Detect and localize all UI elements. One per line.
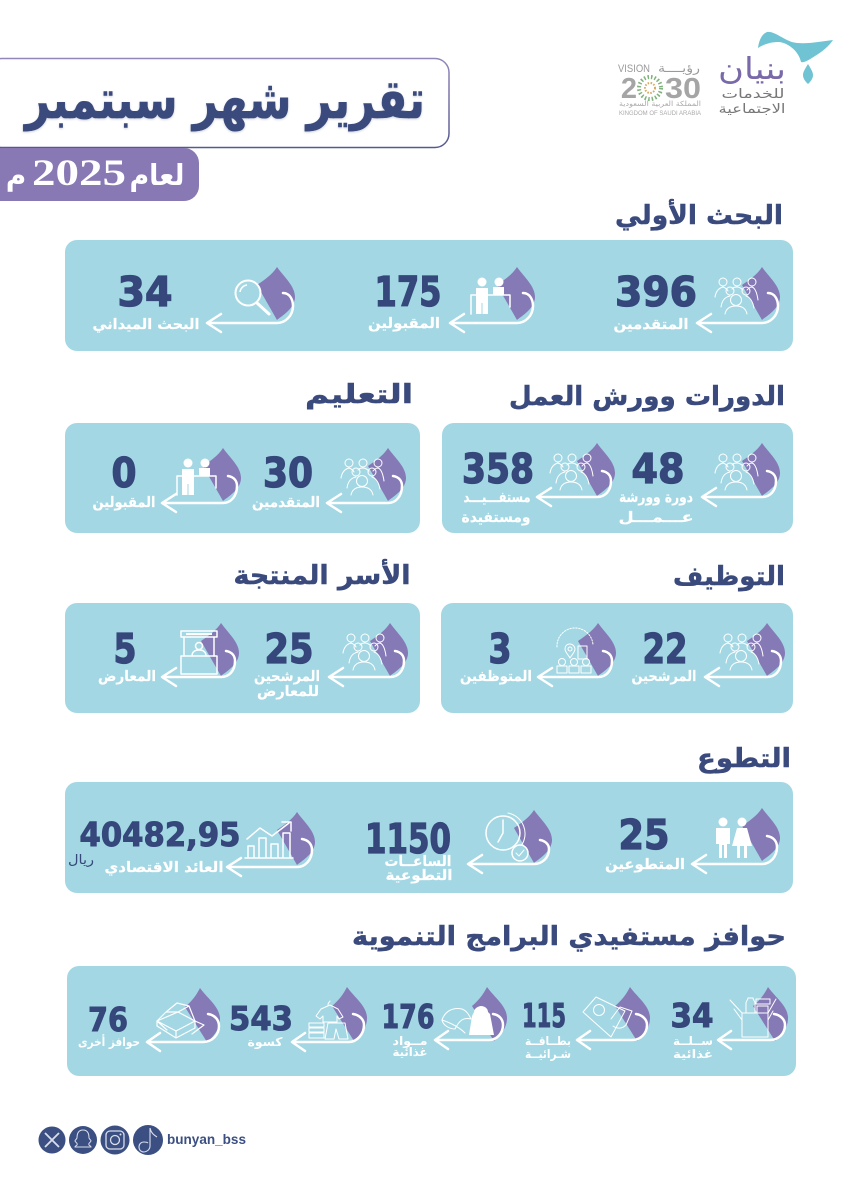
stat: beneficiaries 358: 358 — [462, 445, 534, 493]
logo: Vision 2030: 30 — [665, 73, 701, 105]
stat: clothing 543: كسوة — [248, 1035, 283, 1050]
heading: primary research: البحث الأولي — [615, 199, 783, 231]
stat: nominated for exhibitions 25 — [254, 623, 408, 700]
stat: nominated 22: 22 — [642, 625, 688, 673]
stat: volunteer hours 1150: التطوعية — [386, 868, 452, 884]
stat: economic return 40482,95 — [68, 812, 315, 877]
heading: education: التعليم — [305, 380, 413, 410]
stat: other incentives 76: حوافز أخرى — [78, 1034, 140, 1050]
stat: exhibitions 5 — [98, 623, 239, 686]
stat: purchase card 115: 115 — [522, 996, 566, 1035]
heading: productive families: الأسر المنتجة — [234, 559, 410, 591]
stat: nominated for exhibitions 25: للمعارض — [257, 684, 319, 700]
logo: Bunyan — [718, 32, 833, 117]
stat: clothing 543 — [229, 987, 367, 1051]
stat: food basket 34: 34 — [670, 996, 714, 1035]
stat: clothing 543: 543 — [229, 999, 293, 1038]
stat: applicants 30: 30 — [263, 449, 313, 497]
stat: field research 34: 34 — [118, 268, 172, 316]
stat: employed 3: 3 — [488, 625, 512, 673]
stat: food items 176 — [382, 987, 507, 1059]
stat: exhibitions 5: المعارض — [98, 669, 156, 685]
stat: courses 48: عـــمـــل — [618, 510, 694, 526]
stat: employed 3 — [460, 623, 616, 686]
stat: exhibitions 5: 5 — [114, 625, 136, 673]
logo: Vision 2030: 2 — [621, 73, 637, 105]
stat: volunteers 25 — [605, 808, 780, 873]
logo: Vision 2030 — [618, 61, 702, 117]
logo: Bunyan: الاجتماعية — [718, 102, 786, 117]
stat: economic return 40482,95: ريال — [68, 853, 94, 868]
stat: purchase card 115: شـرائيــة — [525, 1047, 571, 1061]
stat: volunteers 25: 25 — [618, 811, 670, 859]
stat: volunteer hours 1150 — [365, 810, 552, 884]
stat: courses 48 — [618, 443, 780, 526]
stat: volunteer hours 1150: الساعــات — [384, 854, 452, 870]
stat: food basket 34: ســلــة — [673, 1034, 713, 1048]
panel: volunteering — [65, 782, 793, 893]
logo: Vision 2030: رؤيــــة — [658, 61, 700, 76]
stat: applicants 396 — [614, 267, 780, 333]
year badge: م — [6, 159, 26, 192]
heading: courses and workshops: الدورات وورش العمل — [509, 382, 785, 412]
social icons — [38, 1125, 163, 1155]
stat: food items 176: مــواد — [392, 1034, 428, 1049]
stat: purchase card 115 — [522, 987, 650, 1061]
title: تقرير شهر سبتمبر — [23, 68, 425, 131]
logo: Bunyan: بنيان — [718, 52, 786, 87]
stat: food basket 34 — [670, 987, 788, 1061]
stat: field research 34 — [92, 267, 295, 333]
stat: courses 48: 48 — [632, 445, 684, 493]
stat: accepted 175: 175 — [374, 268, 442, 316]
panel: incentives — [67, 966, 796, 1076]
stat: nominated for exhibitions 25: المرشحين — [254, 669, 320, 685]
year badge: لعام — [130, 158, 184, 192]
stat: beneficiaries 358: ومستفيدة — [462, 510, 530, 526]
panel: productive families — [65, 603, 420, 713]
stat: nominated 22: المرشحين — [632, 669, 696, 685]
stat: employed 3: المتوظفين — [460, 669, 532, 685]
stat: food basket 34: غذائية — [673, 1047, 713, 1061]
stat: applicants 396: 396 — [615, 268, 697, 316]
stat: purchase card 115: بطــاقــة — [525, 1034, 571, 1048]
stat: beneficiaries 358 — [462, 443, 615, 526]
stat: nominated for exhibitions 25: 25 — [264, 625, 314, 673]
logo: Vision 2030: VISION — [618, 63, 650, 75]
stat: food items 176: غذائية — [392, 1045, 428, 1059]
stat: food items 176: 176 — [382, 997, 434, 1036]
stat: accepted 0: 0 — [112, 449, 136, 497]
stat: applicants 30 — [252, 448, 406, 512]
year badge — [0, 148, 199, 201]
stat: nominated 22 — [632, 623, 785, 686]
stat: applicants 396: المتقدمين — [614, 317, 688, 333]
stat: beneficiaries 358: مستفـــيـــد — [464, 490, 530, 506]
heading: employment: التوظيف — [673, 562, 785, 592]
stat: economic return 40482,95: العائد الاقتصادي — [104, 860, 224, 877]
panel: courses and workshops — [442, 423, 793, 533]
stat: volunteer hours 1150: 1150 — [365, 815, 451, 863]
stat: accepted 175: المقبولين — [368, 316, 440, 332]
header card — [0, 58, 449, 148]
stat: other incentives 76 — [78, 988, 220, 1051]
heading: volunteering: التطوع — [697, 744, 791, 774]
social handle: bunyan_bss — [167, 1131, 246, 1147]
logo: Bunyan: للخدمات — [722, 87, 784, 102]
stat: volunteers 25: المتطوعين — [605, 857, 685, 873]
logo: Vision 2030: المملكة العربية السعودية — [619, 100, 701, 108]
stat: field research 34: البحث الميداني — [92, 317, 200, 333]
stat: accepted 0 — [92, 448, 241, 512]
stat: accepted 0: المقبولين — [92, 495, 156, 511]
panel: employment — [441, 603, 793, 713]
panel: primary research — [65, 240, 793, 351]
stat: economic return 40482,95: 40482,95 — [80, 815, 240, 854]
logo: Vision 2030: KINGDOM OF SAUDI ARABIA — [619, 110, 702, 117]
stat: courses 48: دورة وورشة — [619, 490, 693, 506]
stat: accepted 175 — [368, 267, 535, 332]
heading: development program incentives: حوافز مستفيدي البرامج التنموية — [352, 922, 786, 952]
stat: other incentives 76: 76 — [88, 1000, 128, 1039]
panel: education — [65, 423, 420, 533]
year badge: 2025 — [32, 153, 126, 194]
stat: applicants 30: المتقدمين — [252, 495, 320, 511]
